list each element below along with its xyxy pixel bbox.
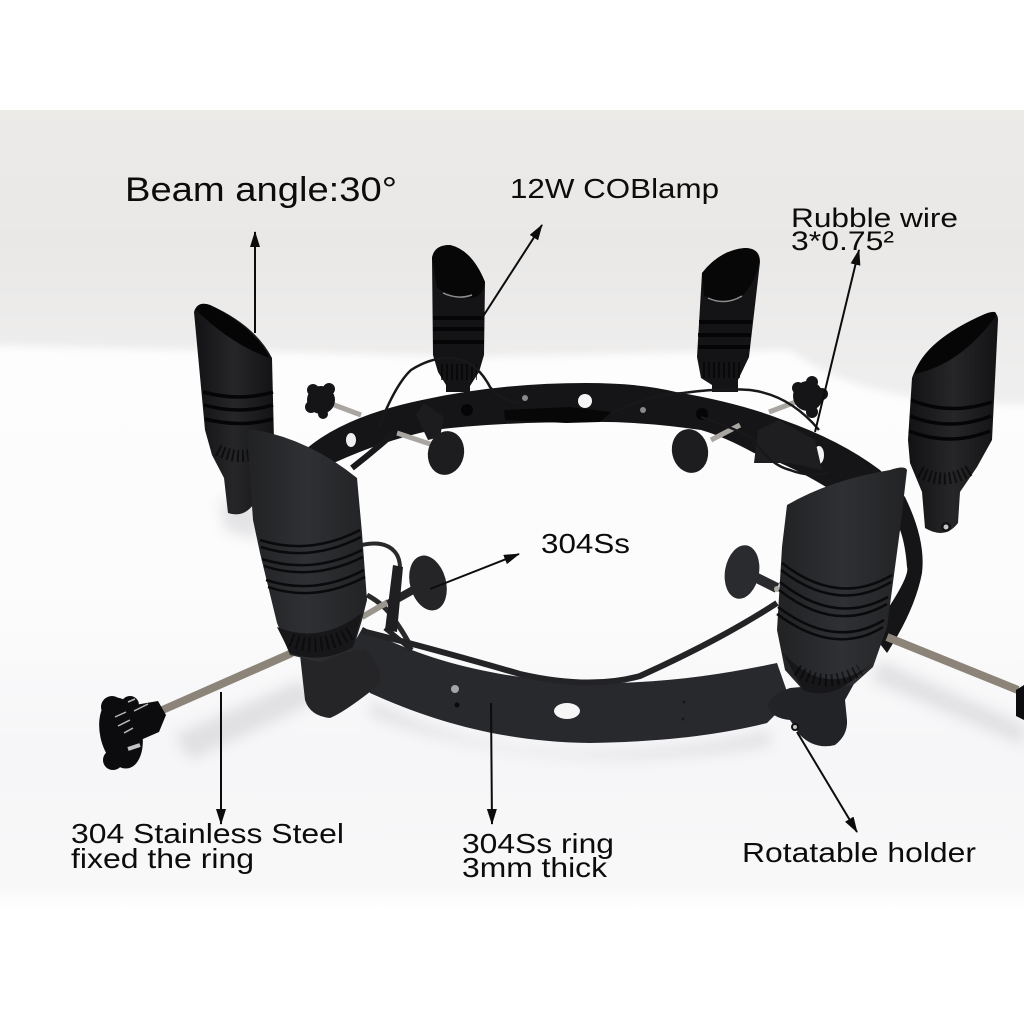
- steel rods and clamps: [93, 542, 1024, 773]
- lamp: front right: [768, 468, 907, 746]
- label: ring thickness: 3mm thick: [462, 852, 608, 883]
- ring screws: [522, 395, 528, 401]
- icon: black knob: [93, 693, 166, 773]
- ring screw: [451, 685, 459, 693]
- infographic: annotated ring light fixture: [0, 110, 1024, 878]
- back of ring: [306, 383, 923, 653]
- ring holes: [578, 394, 592, 408]
- arrow: ring thickness: [491, 703, 492, 824]
- cables: front: [362, 544, 777, 683]
- lamp: rear centre left: [432, 245, 485, 392]
- soft shadows on table: [175, 500, 1024, 760]
- icon: front left clamp: [403, 551, 453, 615]
- back cables: [352, 358, 830, 475]
- icon: front right clamp: [721, 542, 763, 602]
- left threaded rod: [158, 653, 292, 712]
- arrow: rotatable holder: [797, 732, 857, 832]
- label: stainless steel rod: fixed the ring: [71, 843, 254, 874]
- lamp: left rear: [194, 304, 274, 514]
- icon: back left knob: [305, 383, 335, 419]
- icon: back right knob: [792, 376, 828, 418]
- connector: [385, 565, 403, 632]
- lamp: rear centre right: [697, 248, 760, 392]
- label: 304Ss: 304Ss: [541, 528, 630, 559]
- arrow: beam angle: [254, 232, 256, 333]
- photo background: [0, 110, 1024, 816]
- label: rotatable holder: Rotatable holder: [742, 837, 976, 868]
- arrow: 304Ss: [430, 554, 519, 589]
- arrow: rubble wire: [815, 250, 859, 432]
- right rod: [887, 637, 1018, 690]
- front ring band: [350, 627, 790, 743]
- label: stainless steel rod: 304 Stainless Steel: [71, 818, 344, 849]
- lamp: front left: [247, 430, 380, 718]
- arrow: lamp wattage: [482, 225, 542, 318]
- label: rubble wire: 3*0.75²: [791, 226, 894, 256]
- heading: beam angle: Beam angle:30°: [125, 171, 397, 209]
- central connector: [504, 407, 611, 423]
- left bracket: [416, 403, 444, 440]
- right bracket: [754, 420, 822, 470]
- label: rubble wire: Rubble wire: [791, 203, 958, 233]
- ring hole: [554, 703, 580, 719]
- arrow: stainless steel rod: [220, 692, 222, 824]
- icon: back right clamp disc: [668, 426, 712, 476]
- icon: back left clamp disc: [424, 428, 468, 478]
- label: lamp wattage: 12W COBlamp: [510, 173, 719, 204]
- lamp: right rear: [908, 312, 998, 533]
- label: ring thickness: 304Ss ring: [462, 828, 614, 859]
- back steel rods and knobs: [305, 376, 828, 478]
- screw: [791, 723, 799, 731]
